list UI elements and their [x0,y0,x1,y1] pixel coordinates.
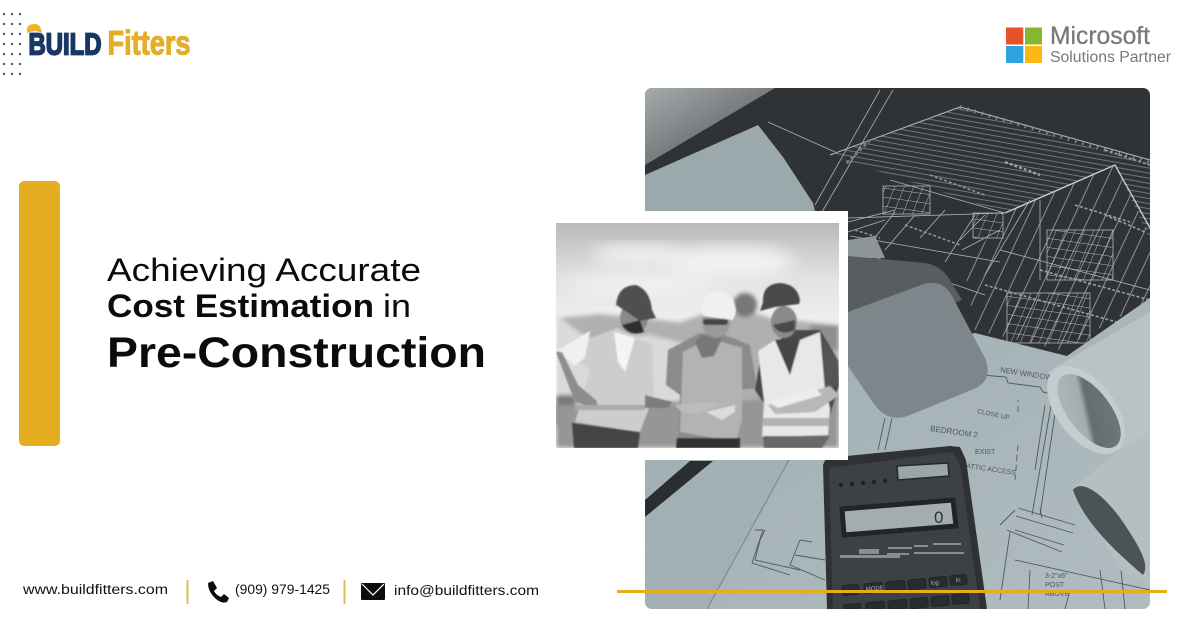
title line 2: Cost Estimation [107,288,374,324]
label: post: POST [1045,582,1065,589]
divider [186,580,188,604]
worker left [556,285,672,448]
clouds [570,245,795,295]
title line 2 suffix: in [383,288,411,324]
calculator [823,446,987,615]
lower roll body [1074,432,1150,571]
worker center [666,291,757,448]
upper roll opening [1057,374,1121,448]
title line 1: Achieving Accurate [107,252,421,288]
photo: three construction workers [556,223,839,448]
upper roll body [1048,312,1150,450]
icon: phone [208,581,229,603]
light drawing sheet [645,298,1150,609]
icon: hard hat [27,24,42,33]
drawing lines on sheet [725,375,1150,609]
calculator mode labels [840,543,964,558]
display digit: 0 [934,508,943,527]
label: new window: NEW WINDOW [1000,365,1054,382]
text: Solutions Partner: Solutions Partner [1050,49,1171,66]
wordmark: BUILD: BUILD [28,26,102,62]
key: ln: ln [956,578,961,584]
logo: Microsoft Solutions Partner [1006,22,1171,66]
sticky shape: light back [848,236,885,258]
sticky shape: dark [848,256,962,312]
phone number: (909) 979-1425 [235,582,330,597]
decorative dot grid [3,13,21,75]
title line 3: Pre-Construction [107,329,486,377]
calculator display [842,500,956,535]
calculator keys [842,574,970,609]
label: exist: EXIST [975,449,996,456]
icon: Microsoft squares [1006,28,1042,63]
wordmark: Fitters: Fitters [108,24,190,62]
text: Microsoft: Microsoft [1050,22,1150,50]
notepad [645,602,652,609]
calculator solar panel [897,463,949,480]
lower roll opening [1073,486,1145,575]
icon: envelope [361,583,385,600]
sticky shape: mid gray [848,283,988,418]
label: attic access: ATTIC ACCESS [966,463,1017,477]
drawing labels [930,365,1069,598]
blueprint rolls [1047,312,1150,575]
blueprint drawing: house elevation [768,90,1150,350]
label: close up: CLOSE UP [977,408,1010,422]
logo: BuildFitters [3,13,191,75]
yellow rule [617,590,1167,593]
sky [556,223,839,323]
website: www.buildfitters.com [22,582,168,597]
shaded top-left corner [645,88,775,165]
upper roll rim [1047,366,1124,454]
ground [556,395,839,448]
key: MODE: MODE [866,585,884,593]
pen [645,461,713,517]
calculator indicator dots [839,479,887,487]
label: bedroom 2: BEDROOM 2 [930,424,979,440]
accent bar [19,181,60,446]
footer contacts [22,580,539,604]
dark blueprint sheet [645,88,1150,378]
label: above: ABOVE [1045,591,1069,598]
light paper edge [645,125,816,215]
divider [344,580,346,604]
white frame behind inset photo [540,211,848,460]
notepad edge line [707,460,789,609]
calculator key labels [866,578,960,590]
title [107,252,486,377]
key: log: log [931,580,939,587]
worker right [755,283,839,448]
email: info@buildfitters.com [394,583,539,598]
photo: blueprints and calculator [645,88,1150,615]
label: post above: 3-2"x6" [1045,573,1068,580]
background hills [556,293,839,425]
